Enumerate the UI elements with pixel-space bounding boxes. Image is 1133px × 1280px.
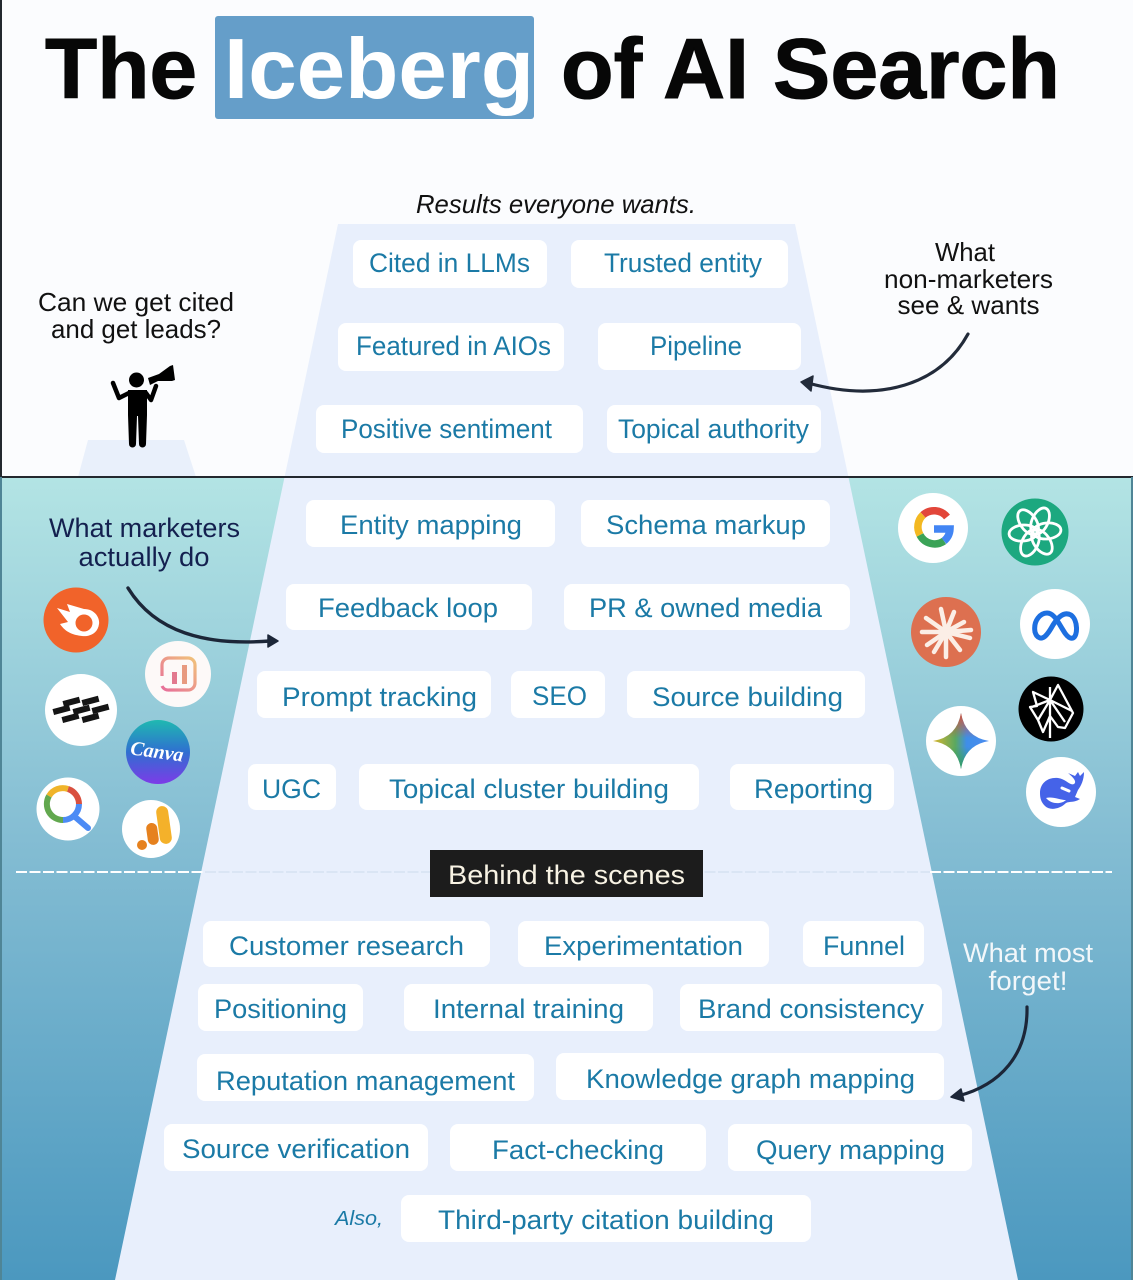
pills: what marketers do: Feedback loop xyxy=(318,593,498,623)
callout: marketers: actually do xyxy=(78,542,210,572)
icon: google analytics xyxy=(122,800,180,858)
callout: marketers: What marketers xyxy=(49,513,240,543)
pills: what marketers do: Prompt tracking xyxy=(282,682,477,712)
callout: most forget xyxy=(963,938,1093,996)
pills: what marketers do: Source building xyxy=(652,682,843,712)
icon: deepseek xyxy=(1026,757,1096,827)
subtitle: Results everyone wants. xyxy=(416,189,696,219)
icon: perplexity xyxy=(1018,676,1084,742)
icon: canva: Canva xyxy=(129,737,185,767)
arrow: marketers xyxy=(128,588,278,647)
behind the scenes label xyxy=(430,850,703,897)
pills: behind the scenes: Query mapping xyxy=(756,1135,945,1165)
pills: behind the scenes: Reputation management xyxy=(216,1066,515,1096)
title: The xyxy=(45,22,197,117)
pills: what marketers do: PR & owned media xyxy=(589,593,823,623)
callout: marketers xyxy=(49,513,240,572)
dashed divider xyxy=(16,871,1112,873)
callout: can we get cited xyxy=(38,287,234,344)
title highlight xyxy=(215,16,534,119)
callout: non-marketers: What xyxy=(935,237,996,267)
pills: behind the scenes xyxy=(164,921,972,1242)
callout: most forget: What most xyxy=(963,938,1093,968)
icon: black dashes logo xyxy=(45,674,117,746)
icon: claude xyxy=(911,597,981,667)
pills: results: Trusted entity xyxy=(604,248,762,278)
pills: behind the scenes: Source verification xyxy=(182,1134,410,1164)
title: Iceberg xyxy=(224,22,534,117)
icon: canva xyxy=(126,720,190,784)
title: of AI Search xyxy=(561,22,1060,117)
iceberg body xyxy=(115,224,1018,1280)
icon: meta xyxy=(1020,589,1090,659)
arrow: most forget xyxy=(951,1007,1027,1101)
pills: what marketers do xyxy=(248,500,894,810)
callout: most forget: forget! xyxy=(988,966,1068,996)
icon: gemini xyxy=(926,706,996,776)
callout: non-marketers xyxy=(884,237,1053,320)
pills: what marketers do: Schema markup xyxy=(606,510,806,540)
pills: behind the scenes: Positioning xyxy=(214,994,347,1024)
pills: results: Topical authority xyxy=(618,414,809,444)
icon: looker studio loop xyxy=(145,641,211,707)
pills: behind the scenes: Internal training xyxy=(433,994,624,1024)
pills: results: Pipeline xyxy=(650,331,742,361)
pills: what marketers do: UGC xyxy=(262,774,321,804)
pills: what marketers do: Reporting xyxy=(754,774,873,804)
icon: google xyxy=(898,493,968,563)
icon: person with megaphone xyxy=(113,365,175,448)
pills: behind the scenes: Experimentation xyxy=(544,931,743,961)
arrow: non-marketers xyxy=(801,334,968,391)
callout: non-marketers: non-marketers xyxy=(884,264,1053,294)
title xyxy=(45,16,1060,119)
pills: behind the scenes: Knowledge graph mapping xyxy=(586,1064,915,1094)
pills: behind the scenes: Third-party citation building xyxy=(438,1205,774,1235)
sky background xyxy=(0,0,1133,477)
icon: semrush xyxy=(44,588,108,652)
pills: results: Cited in LLMs xyxy=(369,248,530,278)
waterline xyxy=(0,476,1133,478)
behind the scenes label: Behind the scenes xyxy=(448,860,685,890)
pills: results xyxy=(316,240,821,453)
pills: behind the scenes: Customer research xyxy=(229,931,464,961)
icon: chatgpt xyxy=(1002,498,1068,566)
pills: behind the scenes: Funnel xyxy=(823,931,905,961)
callout: can we get cited: and get leads? xyxy=(51,314,221,344)
pills: behind the scenes: Brand consistency xyxy=(698,994,925,1024)
icon: google search magnifier xyxy=(36,778,100,840)
pills: behind the scenes: Fact-checking xyxy=(492,1135,664,1165)
also label: Also, xyxy=(334,1208,383,1230)
callout: non-marketers: see & wants xyxy=(898,290,1040,320)
callout: can we get cited: Can we get cited xyxy=(38,287,234,317)
pills: results: Featured in AIOs xyxy=(356,331,551,361)
small iceberg under person xyxy=(78,440,196,477)
pills: what marketers do: SEO xyxy=(532,681,587,711)
pills: what marketers do: Topical cluster building xyxy=(389,774,669,804)
water background xyxy=(0,477,1133,1280)
pills: results: Positive sentiment xyxy=(341,414,552,444)
pills: what marketers do: Entity mapping xyxy=(340,510,522,540)
